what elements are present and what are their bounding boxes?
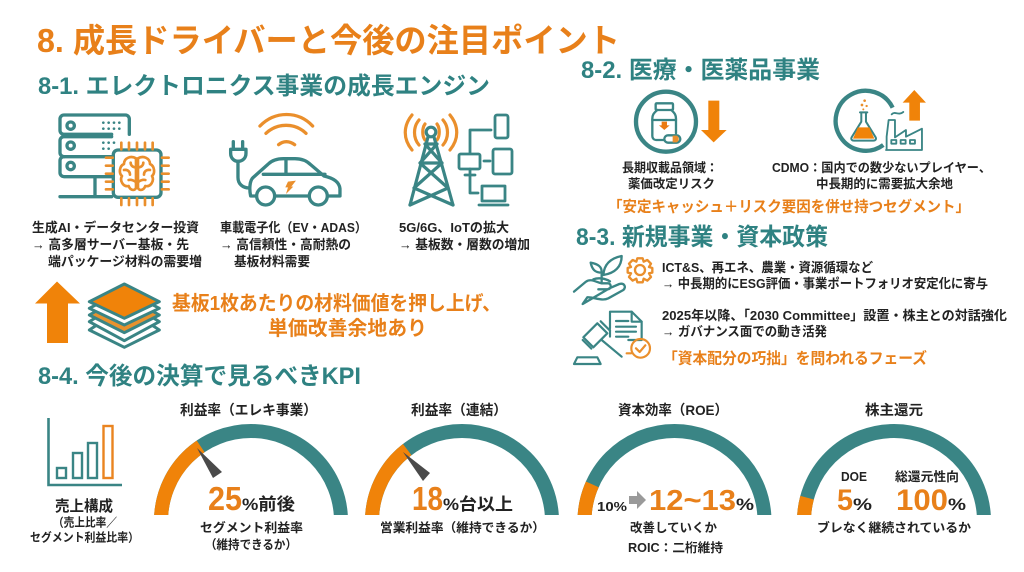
text: long-listed drugs <box>622 160 718 191</box>
gauge: electronics margin <box>161 402 341 552</box>
text: sales mix: （売上比率／ <box>53 514 117 530</box>
text: generative AI: 生成AI・データセンター投資 <box>32 220 199 235</box>
gauge: electronics margin: %前後 <box>242 494 295 514</box>
title: 8. 成長ドライバーと今後の注目ポイント <box>37 22 620 59</box>
text: new businesses: → 中長期的にESG評価・事業ポートフォリオ安定化に寄与 <box>662 276 988 291</box>
text: vehicle electronics: 車載電子化（EV・ADAS） <box>220 220 367 235</box>
gauge: electronics margin: セグメント利益率 <box>200 520 303 535</box>
gauge: ROE: ROIC：二桁維持 <box>628 540 723 555</box>
gauge: consolidated margin: 営業利益率（維持できるか） <box>380 520 545 535</box>
gauge: shareholder returns: % <box>853 495 872 514</box>
icon: electric car with wifi <box>231 114 340 205</box>
heading: 8-3: 8-3. 新規事業・資本政策 <box>576 224 828 251</box>
gauge: consolidated margin: 利益率（連結） <box>411 402 507 418</box>
gauge: shareholder returns: 株主還元 <box>865 402 923 418</box>
text: 5G and IoT <box>399 220 530 252</box>
text: generative AI: 端パッケージ材料の需要増 <box>48 254 202 269</box>
heading: 8-4: 8-4. 今後の決算で見るべきKPI <box>38 363 361 390</box>
text: governance: → ガバナンス面での動き活発 <box>662 324 827 339</box>
text: vehicle electronics: → 高信頼性・高耐熱の <box>220 237 351 252</box>
gauge: ROE <box>584 402 764 555</box>
icon: hand with plant and gear <box>574 256 652 304</box>
icon: server and AI chip <box>60 115 169 205</box>
text: CDMO: CDMO：国内での数少ないプレイヤー、 <box>772 160 991 175</box>
text: 5G and IoT: 5G/6G、IoTの拡大 <box>399 220 509 235</box>
gauge: shareholder returns: ブレなく継続されているか <box>817 520 971 535</box>
icon: stacked substrate layers <box>89 284 159 347</box>
callout: material value: 単価改善余地あり <box>268 317 427 340</box>
text: long-listed drugs: 長期収載品領域： <box>622 160 718 175</box>
gauge: ROE: 12~13 <box>649 485 736 517</box>
gauge: electronics margin: （維持できるか） <box>205 537 297 552</box>
gauge: consolidated margin: %台以上 <box>443 494 513 514</box>
text: long-listed drugs: 薬価改定リスク <box>628 176 715 191</box>
callout: material value <box>172 292 501 340</box>
text: sales mix: セグメント利益比率） <box>30 530 139 544</box>
heading: 8-1: 8-1. エレクトロニクス事業の成長エンジン <box>38 73 490 100</box>
text: sales mix: 売上構成 <box>55 497 113 515</box>
gauge: ROE: 改善していくか <box>630 520 717 535</box>
icon: flask and factory with up arrow <box>836 90 926 151</box>
text: vehicle electronics: 基板材料需要 <box>234 254 310 269</box>
gauge: shareholder returns: % <box>948 495 966 514</box>
icon: up arrow <box>35 282 80 343</box>
text: sales mix <box>30 497 139 544</box>
callout: material value: 基板1枚あたりの材料価値を押し上げ、 <box>172 292 501 315</box>
text: governance <box>662 308 1007 339</box>
callout: capital allocation: 「資本配分の巧拙」を問われるフェーズ <box>663 348 927 368</box>
icon: 5G tower and devices <box>405 115 512 205</box>
gauge: shareholder returns: 5 <box>837 484 853 517</box>
gauge: shareholder returns: 100 <box>896 484 948 517</box>
gauge: shareholder returns: DOE <box>841 470 867 484</box>
text: new businesses <box>662 260 988 291</box>
icon: sales mix bar chart <box>48 418 122 485</box>
gauge: ROE: 資本効率（ROE） <box>618 402 728 418</box>
gauge: consolidated margin <box>372 402 552 535</box>
gauge: shareholder returns <box>804 402 984 535</box>
heading: 8-2: 8-2. 医療・医薬品事業 <box>581 57 820 84</box>
text: new businesses: ICT&S、再エネ、農業・資源循環など <box>662 260 873 275</box>
gauge: shareholder returns: 総還元性向 <box>895 469 959 484</box>
gauge: ROE: % <box>736 495 754 514</box>
text: CDMO: 中長期的に需要拡大余地 <box>816 176 953 191</box>
text: 5G and IoT: → 基板数・層数の増加 <box>399 237 530 252</box>
text: generative AI <box>32 220 202 269</box>
icon: medicine bottle with down arrow <box>636 92 727 152</box>
text: governance: 2025年以降、「2030 Committee」設置・株主との対話強化 <box>662 308 1007 323</box>
icon: gavel, document and check <box>574 312 650 364</box>
gauge: consolidated margin: 18 <box>412 480 443 517</box>
gauge: electronics margin: 利益率（エレキ事業） <box>180 402 317 418</box>
gauge: ROE: 10% <box>597 499 627 514</box>
text: generative AI: → 高多層サーバー基板・先 <box>32 237 189 252</box>
gauge: electronics margin: 25 <box>208 480 242 517</box>
text: vehicle electronics <box>220 220 367 269</box>
callout: stable cash: 「安定キャッシュ＋リスク要因を併せ持つセグメント」 <box>608 198 970 216</box>
text: CDMO <box>772 160 991 191</box>
